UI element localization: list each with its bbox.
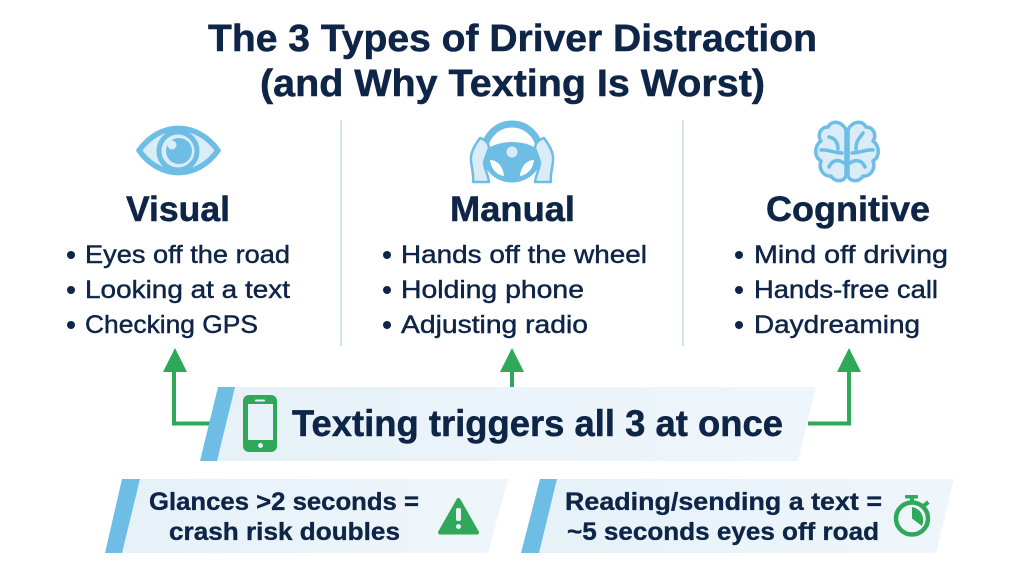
list: manual: Holding phone [401,276,584,304]
heading: Visual: Visual [126,190,230,229]
heading: Manual: Manual [450,190,575,229]
list: manual: Adjusting radio [401,311,588,339]
list: visual: Looking at a text [85,276,290,304]
list: cognitive: Hands-free call [754,276,938,304]
glances text: crash risk doubles [169,518,400,546]
heading: Cognitive: Cognitive [766,190,930,229]
list: visual: Eyes off the road [85,241,290,269]
title: (and Why Texting Is Worst) [260,63,765,105]
glances text [149,488,419,546]
reading text: Reading/sending a text = [565,488,882,516]
list: manual: Hands off the wheel [401,241,647,269]
list: visual: Checking GPS [85,311,258,339]
icon: eye [139,128,218,173]
icon: stopwatch [896,495,930,534]
list: visual [67,241,290,339]
arrow: to manual [500,348,524,387]
arrow: to cognitive [808,348,861,424]
panel: visual [67,128,290,339]
title [208,18,817,105]
icon: phone [243,395,277,452]
list: manual [383,241,647,339]
callout: reading a text [521,479,954,553]
arrow: to visual [163,348,210,424]
callout text: Texting triggers all 3 at once [292,403,783,444]
reading text [565,488,882,546]
list: cognitive [735,241,948,339]
list: cognitive: Mind off driving [754,241,948,269]
callout: texting triggers all 3 [200,387,816,461]
reading text: ~5 seconds eyes off road [567,518,879,546]
icon: brain [816,122,878,181]
icon: warning triangle [440,500,477,532]
title: The 3 Types of Driver Distraction [208,18,817,60]
callout: glances [105,479,508,553]
icon: steering wheel with hands [471,124,553,182]
panel: manual [383,124,647,339]
list: cognitive: Daydreaming [754,311,920,339]
glances text: Glances >2 seconds = [149,488,419,516]
panel: cognitive [735,122,948,339]
